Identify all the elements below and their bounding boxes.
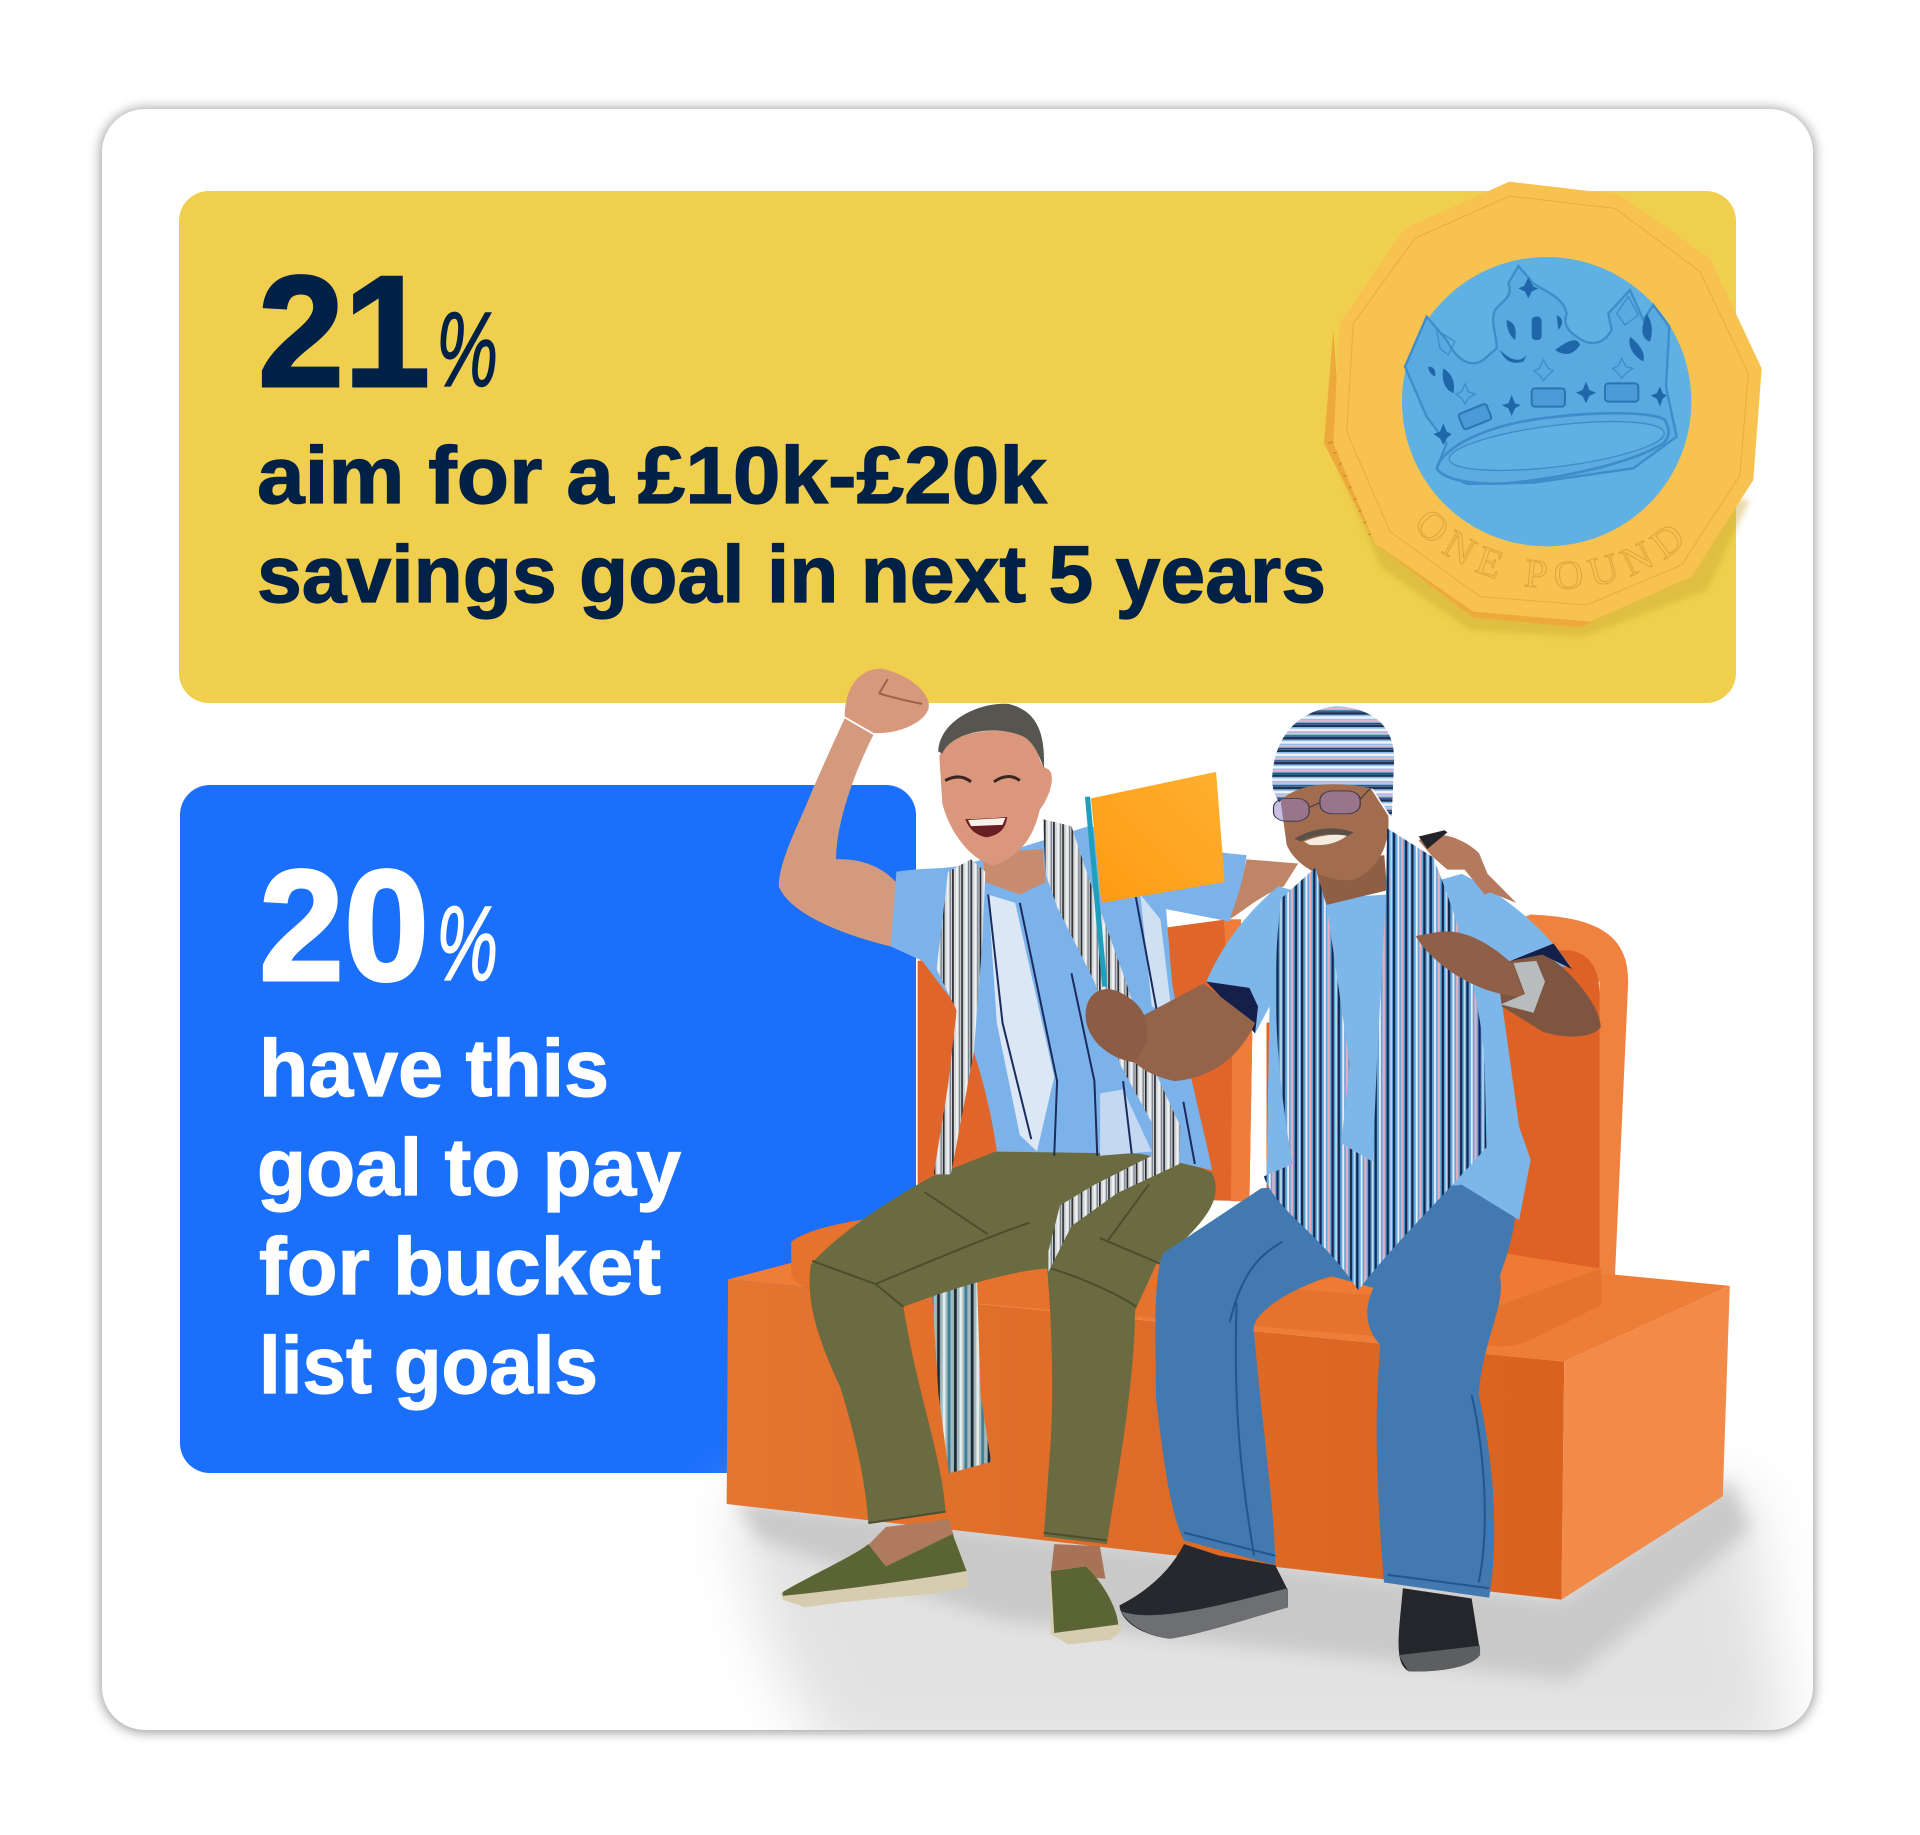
text: bucket list description: have this bbox=[259, 1024, 609, 1114]
neck bbox=[1310, 855, 1387, 905]
shirt bbox=[1206, 874, 1571, 1220]
forearm bbox=[1129, 984, 1255, 1081]
furniture: orange bench and seat backs bbox=[727, 914, 1730, 1600]
scarf bbox=[1264, 828, 1486, 1290]
statistic: 20 percent: % bbox=[436, 885, 498, 1003]
infographic canvas bbox=[179, 182, 1798, 1730]
icon: one pound coin bbox=[1324, 182, 1762, 636]
person: man with raised fist bbox=[779, 669, 1298, 1644]
fist holding flag bbox=[1086, 989, 1147, 1062]
coin lettering: ONE POUND: ONE POUND bbox=[1418, 512, 1682, 590]
jeans bbox=[1155, 1173, 1515, 1598]
text: savings goal description: aim for a £10k-£20k bbox=[257, 431, 1048, 521]
card background bbox=[102, 109, 1813, 1730]
yellow panel bbox=[179, 191, 1736, 703]
right boot bbox=[1399, 1588, 1480, 1671]
head bbox=[1281, 782, 1389, 880]
right seat back inner face bbox=[1267, 950, 1600, 1272]
text: bucket list description: list goals bbox=[259, 1321, 598, 1411]
crown cut-outs bbox=[1428, 277, 1667, 445]
scarf left band bbox=[934, 859, 985, 1174]
right seat back bbox=[1267, 914, 1628, 1300]
head bbox=[939, 731, 1052, 866]
hair bbox=[938, 704, 1044, 768]
left seat back rim bbox=[1224, 919, 1252, 1201]
watch bbox=[1501, 961, 1545, 1013]
statistic: 21 percent: 21 bbox=[258, 244, 430, 420]
hand on shoulder bbox=[1419, 835, 1516, 903]
fist bbox=[845, 669, 929, 733]
right sleeve cuff bbox=[1511, 943, 1572, 969]
sleeve cuff bbox=[1206, 982, 1258, 1033]
floor shadow bbox=[730, 1480, 1790, 1760]
neck bbox=[982, 849, 1046, 895]
person: man in striped hat bbox=[1086, 706, 1601, 1671]
raised forearm bbox=[1496, 953, 1601, 1036]
text: savings goal description: savings goal in next 5 years bbox=[257, 530, 1326, 620]
scarf right band bbox=[1043, 819, 1180, 1272]
statistic: 21 percent: % bbox=[436, 291, 498, 409]
upper body bbox=[779, 669, 1298, 1272]
base box front face bbox=[727, 1279, 1564, 1600]
seat cushion bbox=[791, 1219, 1601, 1346]
hat bbox=[1272, 706, 1394, 818]
text: bucket list description: goal to pay bbox=[257, 1123, 681, 1213]
left seat back bbox=[918, 919, 1252, 1201]
trousers bbox=[810, 1150, 1216, 1544]
right foot and shoe bbox=[1049, 1544, 1121, 1644]
base box side face bbox=[1561, 1286, 1730, 1600]
wristband bbox=[1419, 830, 1447, 849]
left boot bbox=[1119, 1544, 1288, 1639]
mouth bbox=[965, 817, 1007, 837]
text: savings goal description bbox=[257, 431, 1326, 620]
statistic: 20 percent: 20 bbox=[259, 838, 429, 1014]
moustache and smile bbox=[1294, 828, 1354, 841]
scarf end: man one bbox=[931, 1282, 991, 1473]
glasses bbox=[1273, 789, 1370, 821]
base box top bbox=[728, 1263, 1730, 1362]
crown jewels bbox=[1437, 297, 1638, 430]
text: bucket list description bbox=[257, 1024, 681, 1411]
shirt stripes bbox=[988, 895, 1195, 1164]
crown bbox=[1405, 266, 1677, 484]
eyes bbox=[945, 777, 1020, 782]
upper body bbox=[1086, 706, 1601, 1290]
arm around shoulder bbox=[1229, 859, 1298, 919]
blue panel bbox=[180, 785, 916, 1473]
left foot and shoe bbox=[781, 1519, 968, 1607]
text: bucket list description: for bucket bbox=[259, 1222, 661, 1312]
flag bbox=[1088, 772, 1225, 987]
seat cushion top bbox=[1275, 1251, 1601, 1305]
raised arm bbox=[779, 718, 904, 946]
clenched fist bbox=[1416, 931, 1525, 998]
shirt bbox=[891, 826, 1247, 1170]
